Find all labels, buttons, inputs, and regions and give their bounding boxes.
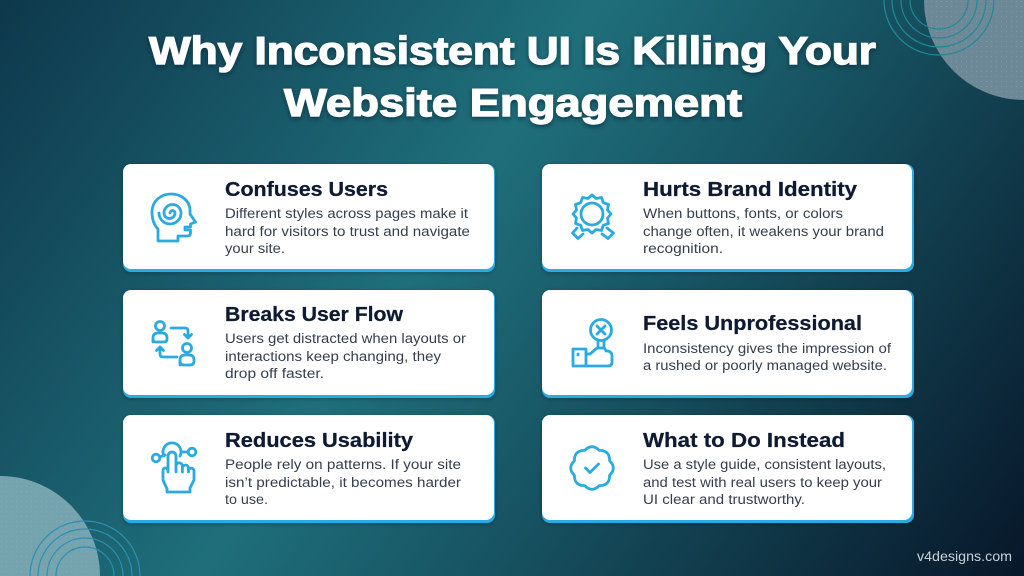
description: a rushed or poorly managed website. bbox=[643, 358, 887, 373]
description: drop off faster. bbox=[225, 366, 324, 381]
panel: Breaks User Flow bbox=[123, 290, 495, 398]
description: interactions keep changing, they bbox=[225, 349, 441, 364]
description: change often, it weakens your brand bbox=[643, 224, 884, 239]
description: recognition. bbox=[643, 241, 723, 256]
decoration: bottom-left circle and rings bbox=[0, 476, 140, 576]
description bbox=[225, 457, 462, 507]
icon: check badge bbox=[571, 447, 613, 489]
heading: Confuses Users bbox=[225, 179, 388, 201]
description: Different styles across pages make it bbox=[225, 206, 468, 221]
description bbox=[643, 457, 886, 507]
description bbox=[643, 341, 891, 373]
description: When buttons, fonts, or colors bbox=[643, 206, 843, 221]
description bbox=[225, 206, 470, 256]
description: UI clear and trustworthy. bbox=[643, 492, 805, 507]
icon: thumb with cross bbox=[573, 320, 612, 366]
title: Why Inconsistent UI Is Killing Your bbox=[149, 30, 876, 73]
heading: Reduces Usability bbox=[225, 430, 414, 452]
title: Website Engagement bbox=[284, 82, 742, 125]
description: People rely on patterns. If your site bbox=[225, 457, 461, 472]
panel: Confuses Users bbox=[123, 164, 495, 272]
description: and test with real users to keep your bbox=[643, 475, 883, 490]
panel: What to Do Instead bbox=[542, 415, 914, 523]
icon: tapping hand bbox=[152, 443, 196, 492]
heading: What to Do Instead bbox=[643, 430, 845, 452]
icon: head with spiral bbox=[152, 194, 196, 241]
heading: Feels Unprofessional bbox=[643, 313, 862, 335]
description: isn’t predictable, it becomes harder bbox=[225, 475, 462, 490]
description: Users get distracted when layouts or bbox=[225, 331, 467, 346]
heading: Hurts Brand Identity bbox=[643, 179, 858, 201]
description: hard for visitors to trust and navigate bbox=[225, 224, 470, 239]
description: to use. bbox=[225, 492, 268, 507]
heading: Breaks User Flow bbox=[225, 304, 403, 326]
icon: users swapping bbox=[153, 322, 194, 365]
description: your site. bbox=[225, 241, 285, 256]
description: Inconsistency gives the impression of bbox=[643, 341, 891, 356]
description bbox=[643, 206, 884, 256]
watermark: v4designs.com bbox=[917, 549, 1012, 564]
icon: award badge bbox=[572, 195, 614, 238]
panel: Hurts Brand Identity bbox=[542, 164, 914, 272]
decoration: top-right circle and rings bbox=[884, 0, 1024, 100]
panel: Reduces Usability bbox=[123, 415, 495, 523]
panel: Feels Unprofessional bbox=[542, 290, 914, 398]
title bbox=[149, 30, 876, 125]
description bbox=[225, 331, 467, 381]
description: Use a style guide, consistent layouts, bbox=[643, 457, 886, 472]
